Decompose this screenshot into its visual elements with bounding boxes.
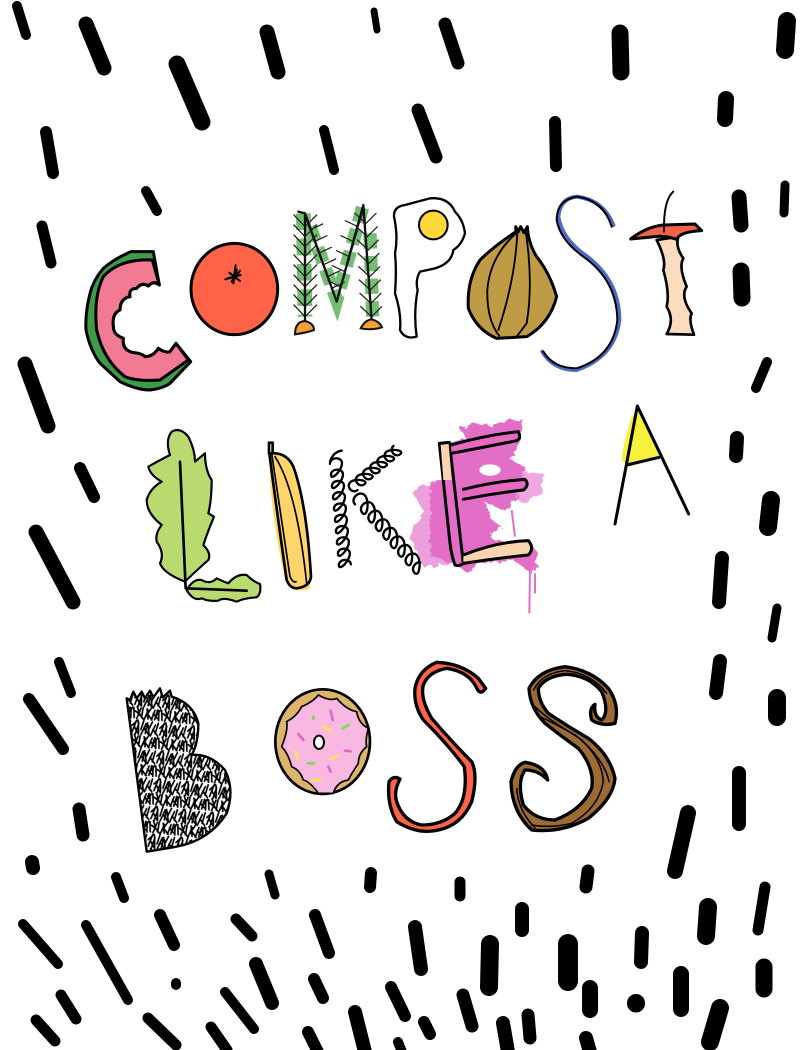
title line 1: COMPOST <box>86 192 723 404</box>
title line 3: BOSS <box>127 636 654 896</box>
title line 2: LIKE <box>143 410 552 634</box>
